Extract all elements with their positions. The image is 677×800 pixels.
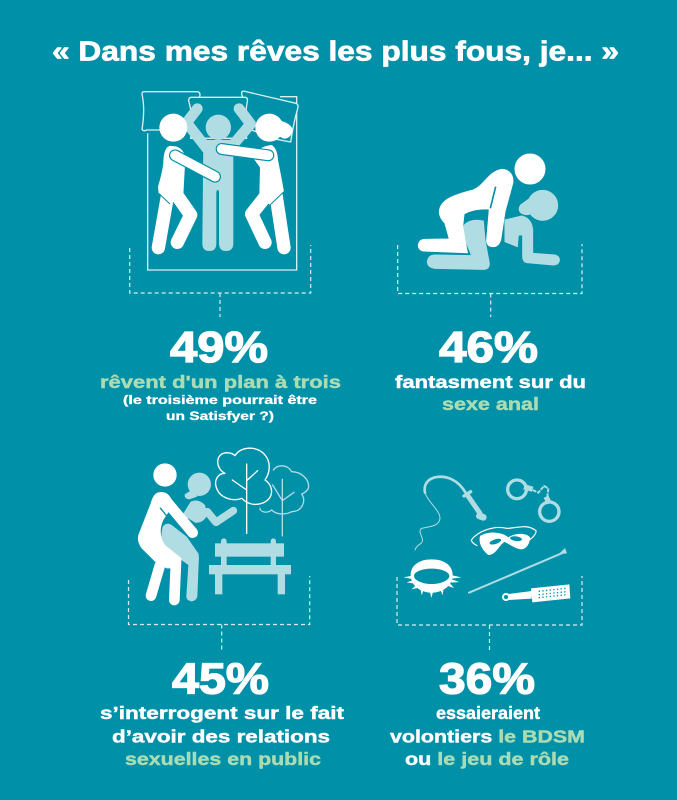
back figure [161, 473, 233, 601]
handcuffs [508, 480, 559, 521]
tree, back [260, 466, 309, 536]
stat: 36%: ou le jeu de rôle [405, 749, 569, 769]
bracket: fourth panel [397, 576, 582, 650]
bracket: third panel [128, 576, 310, 650]
bracket: first panel [130, 245, 311, 317]
icon: BDSM accessories [403, 477, 570, 602]
right figure [222, 114, 293, 248]
stat: 45%: sexuelles en public [125, 749, 321, 769]
stat: 49%: 49% [170, 323, 268, 372]
stat: 49%: un Satisfyer ?) [166, 411, 274, 423]
pillows [142, 91, 298, 142]
front figure [138, 463, 193, 600]
stat: 36%: essaieraient [436, 703, 540, 723]
whip [415, 477, 483, 550]
mask [471, 527, 536, 555]
bottom figure [427, 190, 559, 269]
icon: threesome on a bed [142, 91, 298, 270]
bench [209, 538, 291, 594]
stat: 49%: (le troisième pourrait être [123, 395, 317, 407]
bracket: second panel [398, 244, 582, 317]
left figure [158, 114, 215, 248]
icon: doggy position [418, 154, 559, 269]
icon: couple in a park [138, 448, 309, 601]
stat: 46%: fantasment sur du [395, 372, 586, 392]
tree, front [216, 448, 272, 533]
stat: 45%: 45% [172, 654, 269, 704]
stat: 46% [395, 323, 586, 414]
bed frame [148, 97, 297, 270]
stat: 36%: volontiers le BDSM [390, 726, 585, 746]
stat: 45% [100, 654, 344, 769]
collar [403, 559, 461, 598]
centre figure [187, 109, 251, 251]
riding crop [469, 548, 567, 593]
stat: 45%: s’interrogent sur le fait [100, 703, 344, 723]
stat: 49% [100, 323, 341, 423]
top figure [418, 154, 545, 253]
stat: 45%: d’avoir des relations [112, 726, 330, 746]
paddle [503, 584, 570, 602]
stat: 46%: 46% [439, 323, 538, 372]
stat: 36%: 36% [439, 654, 535, 704]
stat: 36% [390, 654, 585, 769]
title: « Dans mes rêves les plus fous, je... » [52, 36, 619, 66]
stat: 46%: sexe anal [442, 394, 539, 414]
stat: 49%: rêvent d'un plan à trois [100, 372, 341, 392]
